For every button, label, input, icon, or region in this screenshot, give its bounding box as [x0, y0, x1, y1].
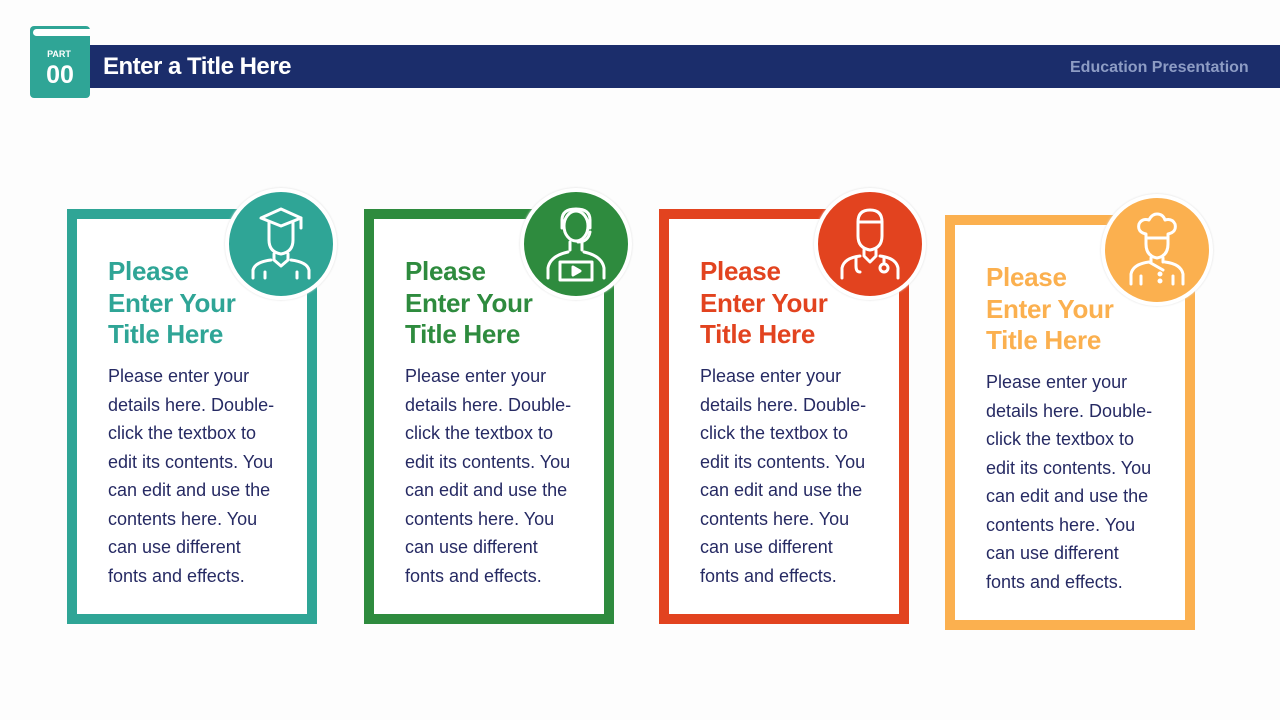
card 3 body: can edit and use the — [700, 480, 862, 500]
card 4 title: Please — [986, 262, 1067, 292]
badge: part 00 — [30, 26, 90, 98]
card 4 — [945, 215, 1195, 630]
card 2 body: fonts and effects. — [405, 566, 542, 586]
card 3 title — [700, 256, 828, 349]
card 1 body: edit its contents. You — [108, 452, 273, 472]
header subtitle: Education Presentation — [1070, 59, 1249, 76]
card 1 — [67, 209, 317, 624]
card 4 body: Please enter your — [986, 372, 1127, 392]
card 2 body: click the textbox to — [405, 423, 553, 443]
card 4 body: contents here. You — [986, 514, 1135, 534]
card 1 body: click the textbox to — [108, 423, 256, 443]
card 1 title: Please — [108, 256, 189, 286]
card 1 title: Title Here — [108, 319, 223, 349]
card 3 title: Please — [700, 256, 781, 286]
card 1 title — [108, 256, 236, 349]
card 2 title: Enter Your — [405, 288, 533, 318]
badge: part 00: PART — [47, 49, 71, 59]
card 1 body: can use different — [108, 537, 241, 557]
card 1 body: fonts and effects. — [108, 566, 245, 586]
card 1 body: can edit and use the — [108, 480, 270, 500]
card 1 body — [108, 366, 274, 586]
card 3 body: Please enter your — [700, 366, 841, 386]
card 1 body: contents here. You — [108, 508, 257, 528]
card 1 body: Please enter your — [108, 366, 249, 386]
card 2 body: can use different — [405, 537, 538, 557]
card 1 title: Enter Your — [108, 288, 236, 318]
card 3 title: Enter Your — [700, 288, 828, 318]
icon: doctor — [814, 188, 926, 300]
card 4 body: details here. Double- — [986, 400, 1152, 420]
header bar — [90, 45, 1280, 88]
card 4 body: can edit and use the — [986, 486, 1148, 506]
icon: chef — [1101, 194, 1213, 306]
card 4 body: can use different — [986, 543, 1119, 563]
icon: graduate — [225, 188, 337, 300]
card 3 body: can use different — [700, 537, 833, 557]
card 3 body: details here. Double- — [700, 394, 866, 414]
card 4 title: Title Here — [986, 325, 1101, 355]
card 3 body: fonts and effects. — [700, 566, 837, 586]
header title: Enter a Title Here — [103, 53, 291, 80]
card 2 body: contents here. You — [405, 508, 554, 528]
card 1 body: details here. Double- — [108, 394, 274, 414]
card 3 title: Title Here — [700, 319, 815, 349]
card 3 body: contents here. You — [700, 508, 849, 528]
icon: support agent — [520, 188, 632, 300]
card 2 body: edit its contents. You — [405, 452, 570, 472]
card 3 body: edit its contents. You — [700, 452, 865, 472]
card 2 title: Please — [405, 256, 486, 286]
card 2 body: can edit and use the — [405, 480, 567, 500]
card 2 — [364, 209, 614, 624]
card 3 — [659, 209, 909, 624]
card 3 body: click the textbox to — [700, 423, 848, 443]
card 2 body: Please enter your — [405, 366, 546, 386]
card 4 body — [986, 372, 1152, 592]
card 3 body — [700, 366, 866, 586]
badge: part 00: 00 — [46, 61, 74, 89]
card 2 body — [405, 366, 571, 586]
card 4 title — [986, 262, 1114, 355]
card 2 title: Title Here — [405, 319, 520, 349]
card 4 title: Enter Your — [986, 294, 1114, 324]
card 4 body: click the textbox to — [986, 429, 1134, 449]
card 4 body: edit its contents. You — [986, 458, 1151, 478]
card 2 body: details here. Double- — [405, 394, 571, 414]
card 4 body: fonts and effects. — [986, 572, 1123, 592]
card 2 title — [405, 256, 533, 349]
